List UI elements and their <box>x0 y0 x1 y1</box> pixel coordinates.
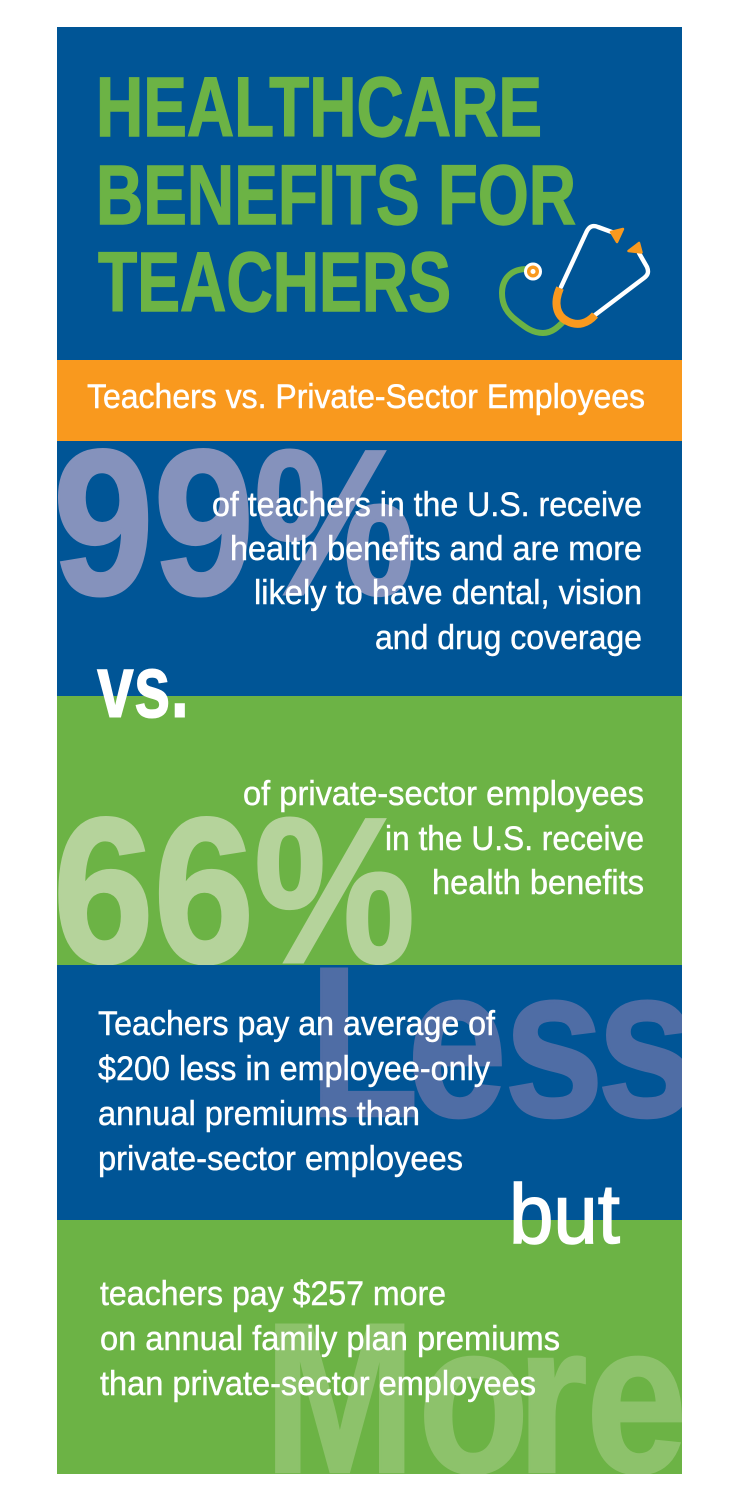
panel: 66 percent of private-sector employees <box>57 696 682 965</box>
text: private-sector benefits <box>243 775 644 902</box>
text: teachers receive benefits: likely to have dental, vision <box>254 574 642 612</box>
title: BENEFITS FOR <box>96 148 576 242</box>
text: teachers pay less: private-sector employees <box>98 1140 463 1178</box>
text: teachers pay less: Teachers pay an average of <box>98 1005 496 1043</box>
title: HEALTHCARE <box>96 60 542 154</box>
text: teachers pay more: than private-sector employees <box>100 1365 536 1403</box>
text: teachers receive benefits: of teachers in the U.S. receive <box>212 486 642 524</box>
panel: subtitle banner: Teachers vs. Private-Sector Employees <box>87 378 645 416</box>
title: TEACHERS <box>98 235 451 329</box>
title <box>96 60 576 329</box>
icon: stethoscope <box>502 226 648 333</box>
text: teachers receive benefits: and drug coverage <box>375 619 642 657</box>
big word: Less: Less <box>309 922 697 1161</box>
big number: 66%: 66% <box>53 775 415 1006</box>
panel: less <box>57 965 682 1220</box>
panel: 99 percent of teachers <box>57 441 682 696</box>
big number: 99%: 99% <box>53 407 415 638</box>
text: private-sector benefits: in the U.S. receive <box>385 820 644 858</box>
text: teachers pay less: annual premiums than <box>98 1095 420 1133</box>
text: teachers pay more: on annual family plan premiums <box>100 1320 560 1358</box>
panel: subtitle banner <box>57 360 682 441</box>
panel: more <box>57 1220 682 1474</box>
text: teachers pay more <box>100 1275 560 1403</box>
text: teachers pay less: $200 less in employee-only <box>98 1050 490 1088</box>
label: but: but <box>509 1167 620 1261</box>
text: teachers pay less <box>98 1005 496 1178</box>
text: teachers receive benefits <box>212 486 642 657</box>
text: teachers receive benefits: health benefits and are more <box>230 530 642 568</box>
text: teachers pay more: teachers pay $257 more <box>100 1275 446 1313</box>
big word: More: More <box>264 1279 687 1512</box>
text: private-sector benefits: of private-sector employees <box>243 775 644 813</box>
label: vs.: vs. <box>97 636 189 736</box>
panel: header <box>57 27 682 360</box>
text: private-sector benefits: health benefits <box>432 864 644 902</box>
